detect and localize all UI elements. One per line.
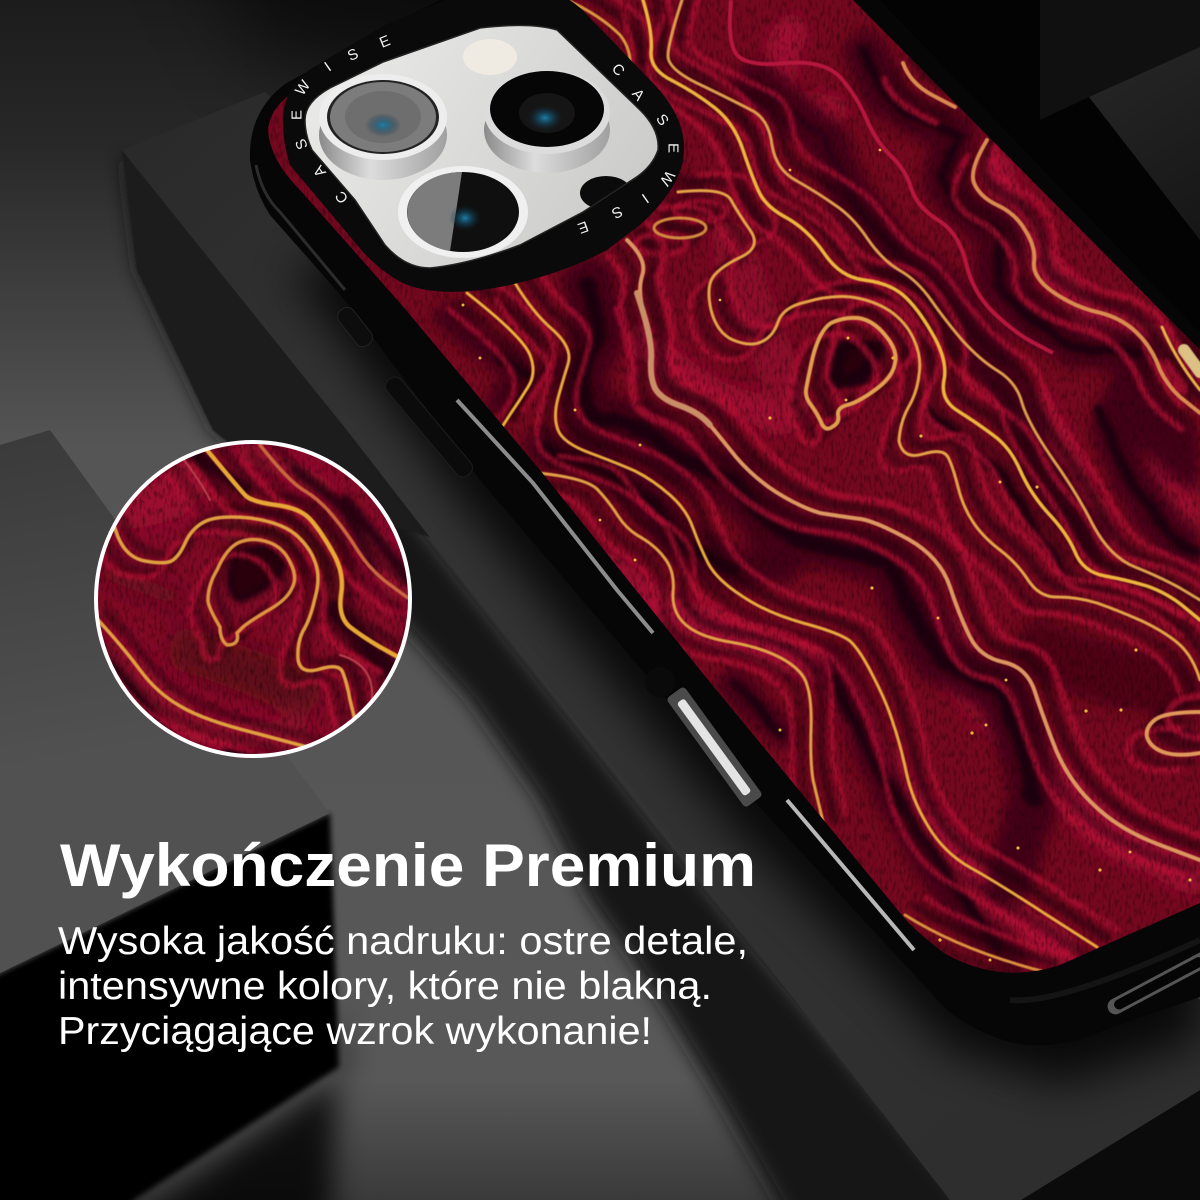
inset parallel contours	[102, 444, 408, 754]
block: top right wall	[1040, 0, 1200, 120]
side buttons	[334, 304, 763, 808]
bezel lettering: C	[332, 187, 352, 207]
inset white ring	[96, 442, 410, 756]
bezel lettering: S	[652, 111, 672, 129]
block: bottom right corner	[1021, 1090, 1200, 1200]
fine fabric texture	[268, 0, 1200, 972]
bezel lettering: A	[628, 86, 648, 104]
body text: Wysoka jakość nadruku: ostre detale,	[58, 920, 748, 963]
camera window: frosted glass	[295, 20, 665, 275]
body text: intensywne kolory, które nie blakną.	[58, 965, 712, 1008]
dark marble veins	[500, 50, 1200, 950]
bezel lettering: W	[292, 77, 315, 99]
bezel lettering: C	[608, 60, 628, 80]
bezel lettering: A	[310, 162, 330, 180]
bezel lettering: W	[655, 167, 678, 189]
bezel lettering: S	[345, 45, 361, 65]
bezel ring	[283, 0, 684, 292]
flash	[463, 39, 517, 75]
block: lower left soft shadow	[60, 1000, 348, 1200]
gold speckles	[462, 149, 1192, 962]
camera island	[283, 0, 684, 292]
block: top right plinth	[1089, 47, 1200, 240]
bezel lettering: E	[664, 143, 682, 153]
charging port	[1105, 949, 1200, 1017]
inset gold veins	[98, 445, 408, 747]
wine shadow bands	[450, 50, 1200, 955]
bright crimson bands	[600, 30, 1200, 950]
bezel lettering: S	[609, 202, 625, 222]
bezel lettering: I	[638, 190, 652, 206]
bright red thread line	[730, 0, 1053, 353]
zoom inset: circular marble detail	[80, 437, 420, 765]
phone back: red marble print	[268, 0, 1200, 973]
bezel lettering: E	[575, 217, 591, 237]
lens: upper right	[484, 70, 610, 173]
lens: upper left	[319, 74, 447, 180]
heading: Wykończenie Premium	[60, 832, 756, 899]
body text: Przyciągające wzrok wykonanie!	[58, 1010, 652, 1053]
bezel lettering: I	[321, 59, 335, 75]
block: side face in shadow	[122, 150, 1000, 1200]
lens: bottom	[398, 166, 528, 258]
inset texture	[90, 440, 420, 760]
block: lower left front face	[0, 813, 339, 1200]
block: side face upper	[122, 150, 430, 537]
phone shadow	[290, 200, 1200, 1085]
case glossy highlights	[256, 165, 1200, 1000]
bezel inner edge	[305, 25, 658, 268]
bezel lettering: E	[288, 110, 306, 120]
sensor hole	[580, 176, 632, 210]
parallel contour shadows	[448, 0, 1200, 988]
phone case body	[250, 0, 1200, 1045]
bezel lettering: S	[292, 136, 312, 152]
block: lower left top face	[0, 430, 330, 973]
background: top shade	[170, 0, 1050, 100]
bezel lettering: E	[377, 32, 393, 52]
block: top right void	[850, 0, 1200, 420]
bezel lettering	[288, 32, 682, 237]
body text	[58, 920, 748, 1053]
gold veins	[467, 0, 1200, 972]
inset dark veins	[105, 450, 410, 765]
inset crimson areas	[100, 450, 400, 740]
